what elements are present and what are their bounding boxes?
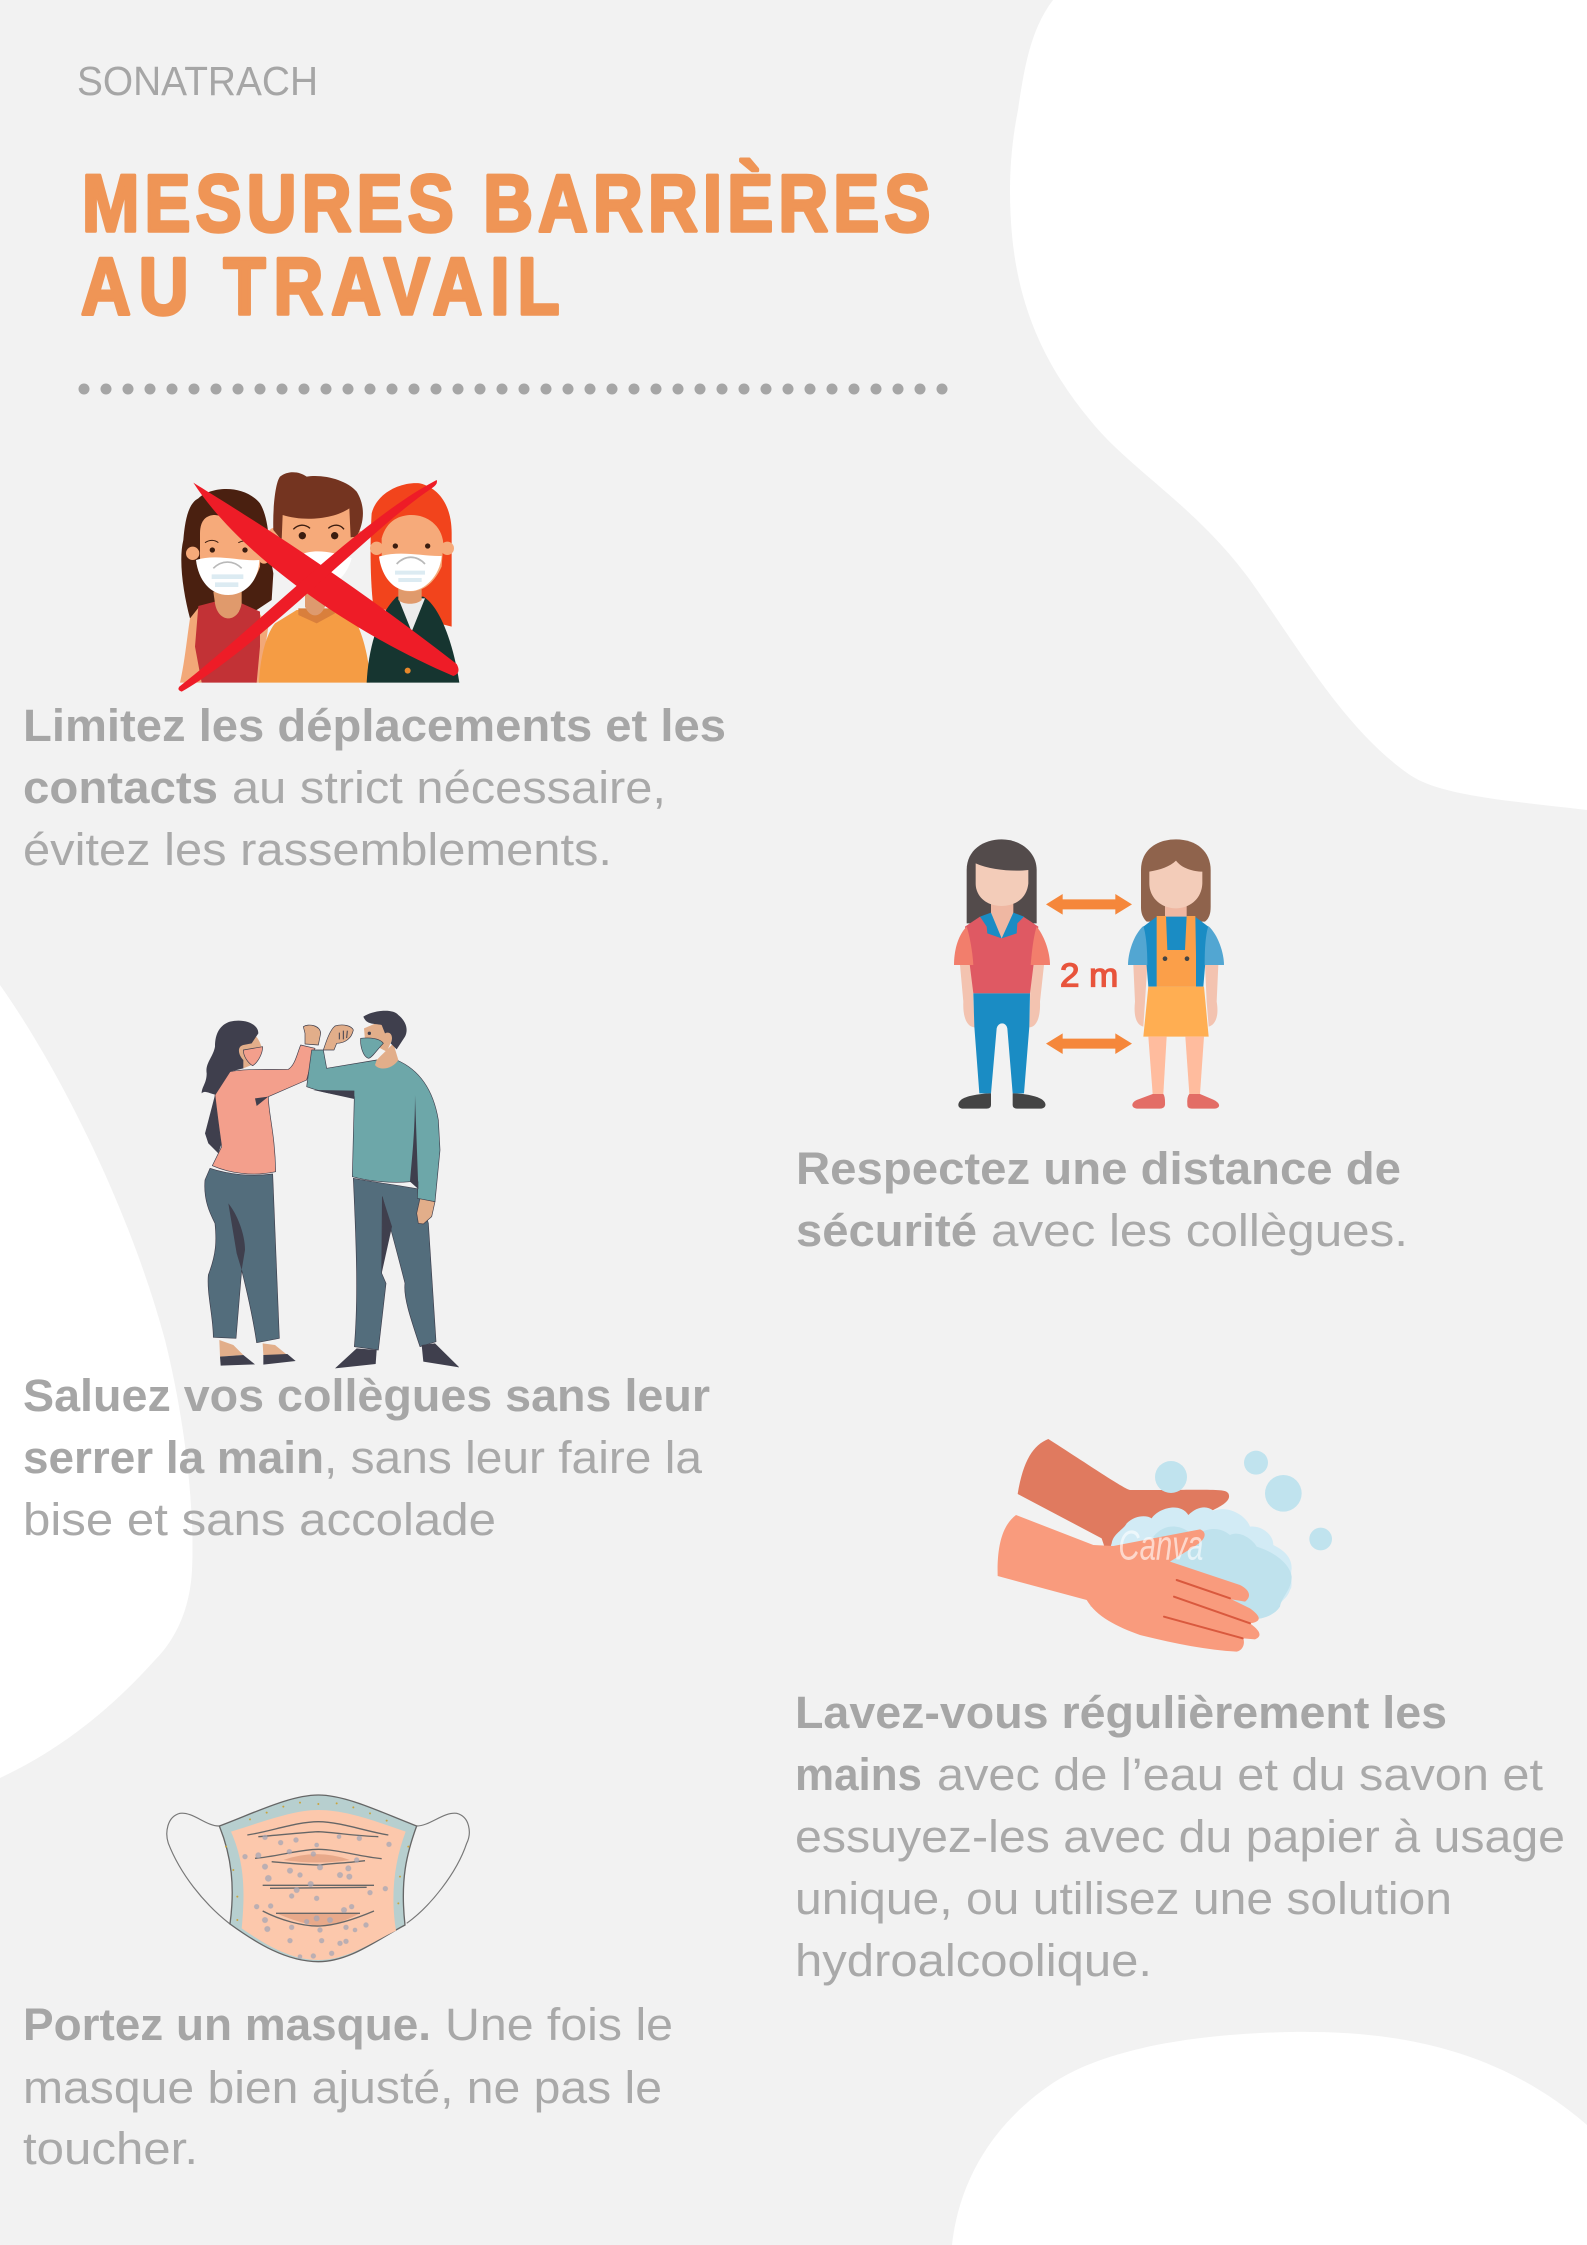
text: greeting colleagues: Saluez vos collègues sans leur: [23, 1370, 710, 1421]
text: safe distance: [796, 1143, 1408, 1256]
title: MESURES BARRIÈRES: [82, 158, 930, 248]
text: wash hands: unique, ou utilisez une solution: [795, 1873, 1452, 1924]
text: limit movement: évitez les rassemblements.: [23, 824, 612, 875]
text: wear a mask: Une fois le: [445, 1999, 673, 2050]
icon: hand washing with soap: [998, 1439, 1332, 1652]
text: greeting colleagues: serrer la main: [23, 1432, 324, 1483]
text: safe distance: avec les collègues.: [991, 1205, 1408, 1256]
text: safe distance: sécurité: [796, 1205, 977, 1256]
text: wear a mask: Portez un masque.: [23, 1999, 431, 2050]
text: limit movement: Limitez les déplacements et les: [23, 700, 726, 751]
text: wash hands: hydroalcoolique.: [795, 1935, 1152, 1986]
text: wash hands: [795, 1687, 1565, 1986]
text: wear a mask: [23, 1999, 673, 2174]
text: wash hands: Lavez-vous régulièrement les: [795, 1687, 1447, 1738]
title: [81, 158, 930, 331]
title: AU TRAVAIL: [81, 241, 560, 331]
icon: two people two metres apart: 2 m: [1060, 958, 1118, 995]
text: limit movement: contacts: [23, 762, 218, 813]
text: wear a mask: toucher.: [23, 2123, 198, 2174]
organisation name: SONATRACH: [77, 58, 318, 104]
icon: face mask: [167, 1795, 469, 1962]
text: greeting colleagues: bise et sans accolade: [23, 1494, 496, 1545]
text: limit movement: [23, 700, 726, 875]
text: greeting colleagues: [23, 1370, 710, 1545]
text: safe distance: Respectez une distance de: [796, 1143, 1401, 1194]
icon: hand washing with soap: Canva: [1118, 1521, 1203, 1568]
text: limit movement: au strict nécessaire,: [232, 762, 666, 813]
icon: elbow greeting: [202, 1011, 459, 1368]
text: wear a mask: masque bien ajusté, ne pas le: [23, 2062, 662, 2113]
text: wash hands: essuyez-les avec du papier à usage: [795, 1811, 1565, 1862]
text: greeting colleagues: , sans leur faire la: [324, 1432, 703, 1483]
icon: masked group crossed out: [178, 472, 459, 692]
text: wash hands: avec de l’eau et du savon et: [937, 1749, 1544, 1800]
icon: two people two metres apart: [954, 839, 1224, 1109]
text: wash hands: mains: [795, 1749, 922, 1800]
